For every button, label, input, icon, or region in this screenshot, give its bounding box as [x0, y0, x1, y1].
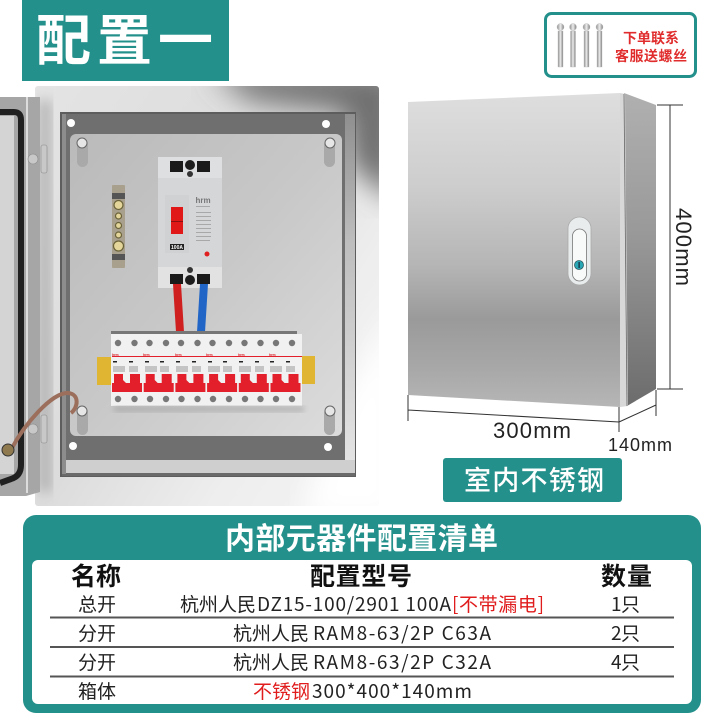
miniature breaker row: hrm	[269, 353, 276, 357]
width label: 300mm	[493, 418, 571, 443]
table body	[32, 560, 692, 704]
row 4: 不锈钢	[253, 677, 310, 704]
row 2: 杭州人民	[233, 619, 309, 646]
miniature breaker row	[111, 331, 304, 412]
blue wire	[197, 284, 208, 332]
table header	[71, 557, 652, 593]
red wire	[173, 284, 184, 332]
row 1: DZ15-100/2901 100A	[257, 590, 451, 617]
row 4	[78, 677, 472, 704]
row 4: 箱体	[78, 677, 116, 704]
miniature breaker row: hrm	[143, 353, 150, 357]
gift text: 客服送螺丝	[615, 46, 687, 66]
open enclosure photo	[0, 86, 379, 506]
gift text	[615, 28, 687, 66]
door shadow	[38, 100, 52, 492]
open door	[0, 97, 40, 496]
row 1: 总开	[78, 590, 116, 617]
door hinges	[28, 145, 47, 443]
miniature breaker row: hrm	[238, 353, 245, 357]
row 1: 杭州人民	[180, 590, 256, 617]
neutral terminal bar	[112, 185, 125, 268]
row 1: 1只	[611, 590, 640, 617]
table rows	[78, 590, 640, 704]
row 2: 分开	[78, 619, 116, 646]
ground strap	[2, 393, 77, 456]
back mounting plate	[70, 134, 342, 436]
enclosure body	[35, 86, 379, 506]
row 3: RAM8-63/2P C32A	[313, 648, 491, 675]
screw gift box	[546, 14, 696, 76]
row 3	[78, 648, 640, 675]
dimension lines	[408, 105, 683, 432]
depth label: 140mm	[608, 435, 672, 455]
miniature breaker row: hrm	[112, 353, 119, 357]
din rail	[97, 356, 315, 385]
row 2: 2只	[611, 619, 640, 646]
side face	[624, 93, 656, 406]
lock handle	[568, 217, 591, 285]
row 3: 4只	[611, 648, 640, 675]
table header: 数量	[601, 557, 652, 593]
mounting holes	[67, 119, 332, 451]
height label: 400mm	[671, 208, 696, 286]
material tag: 室内不锈钢	[464, 459, 604, 498]
row 3: 分开	[78, 648, 116, 675]
row 2	[78, 619, 640, 646]
row 1: [不带漏电]	[452, 590, 544, 617]
front door face	[408, 93, 620, 407]
row 3: 杭州人民	[233, 648, 309, 675]
breaker brand text: hrm	[195, 196, 211, 205]
body reflection	[208, 86, 379, 506]
table header: 名称	[71, 557, 121, 593]
door edge	[620, 93, 628, 407]
list heading: 内部元器件配置清单	[225, 514, 498, 558]
row 2: RAM8-63/2P C63A	[313, 619, 491, 646]
row 4: 300*400*140mm	[312, 677, 472, 704]
main breaker	[158, 157, 222, 288]
breaker red switch	[171, 207, 183, 234]
closed enclosure illustration	[408, 93, 656, 407]
breaker rating label: 100A	[171, 245, 183, 251]
gift text: 下单联系	[623, 28, 679, 48]
expansion screws	[557, 24, 603, 67]
component list panel	[23, 514, 701, 713]
keyhole slots with screws	[77, 138, 335, 435]
table header: 配置型号	[310, 557, 412, 593]
miniature breaker row: hrm	[206, 353, 213, 357]
recessed frame	[60, 112, 356, 477]
material tag	[443, 458, 622, 502]
row dividers	[50, 616, 674, 678]
row 1	[78, 590, 640, 617]
miniature breaker row: hrm	[175, 353, 182, 357]
